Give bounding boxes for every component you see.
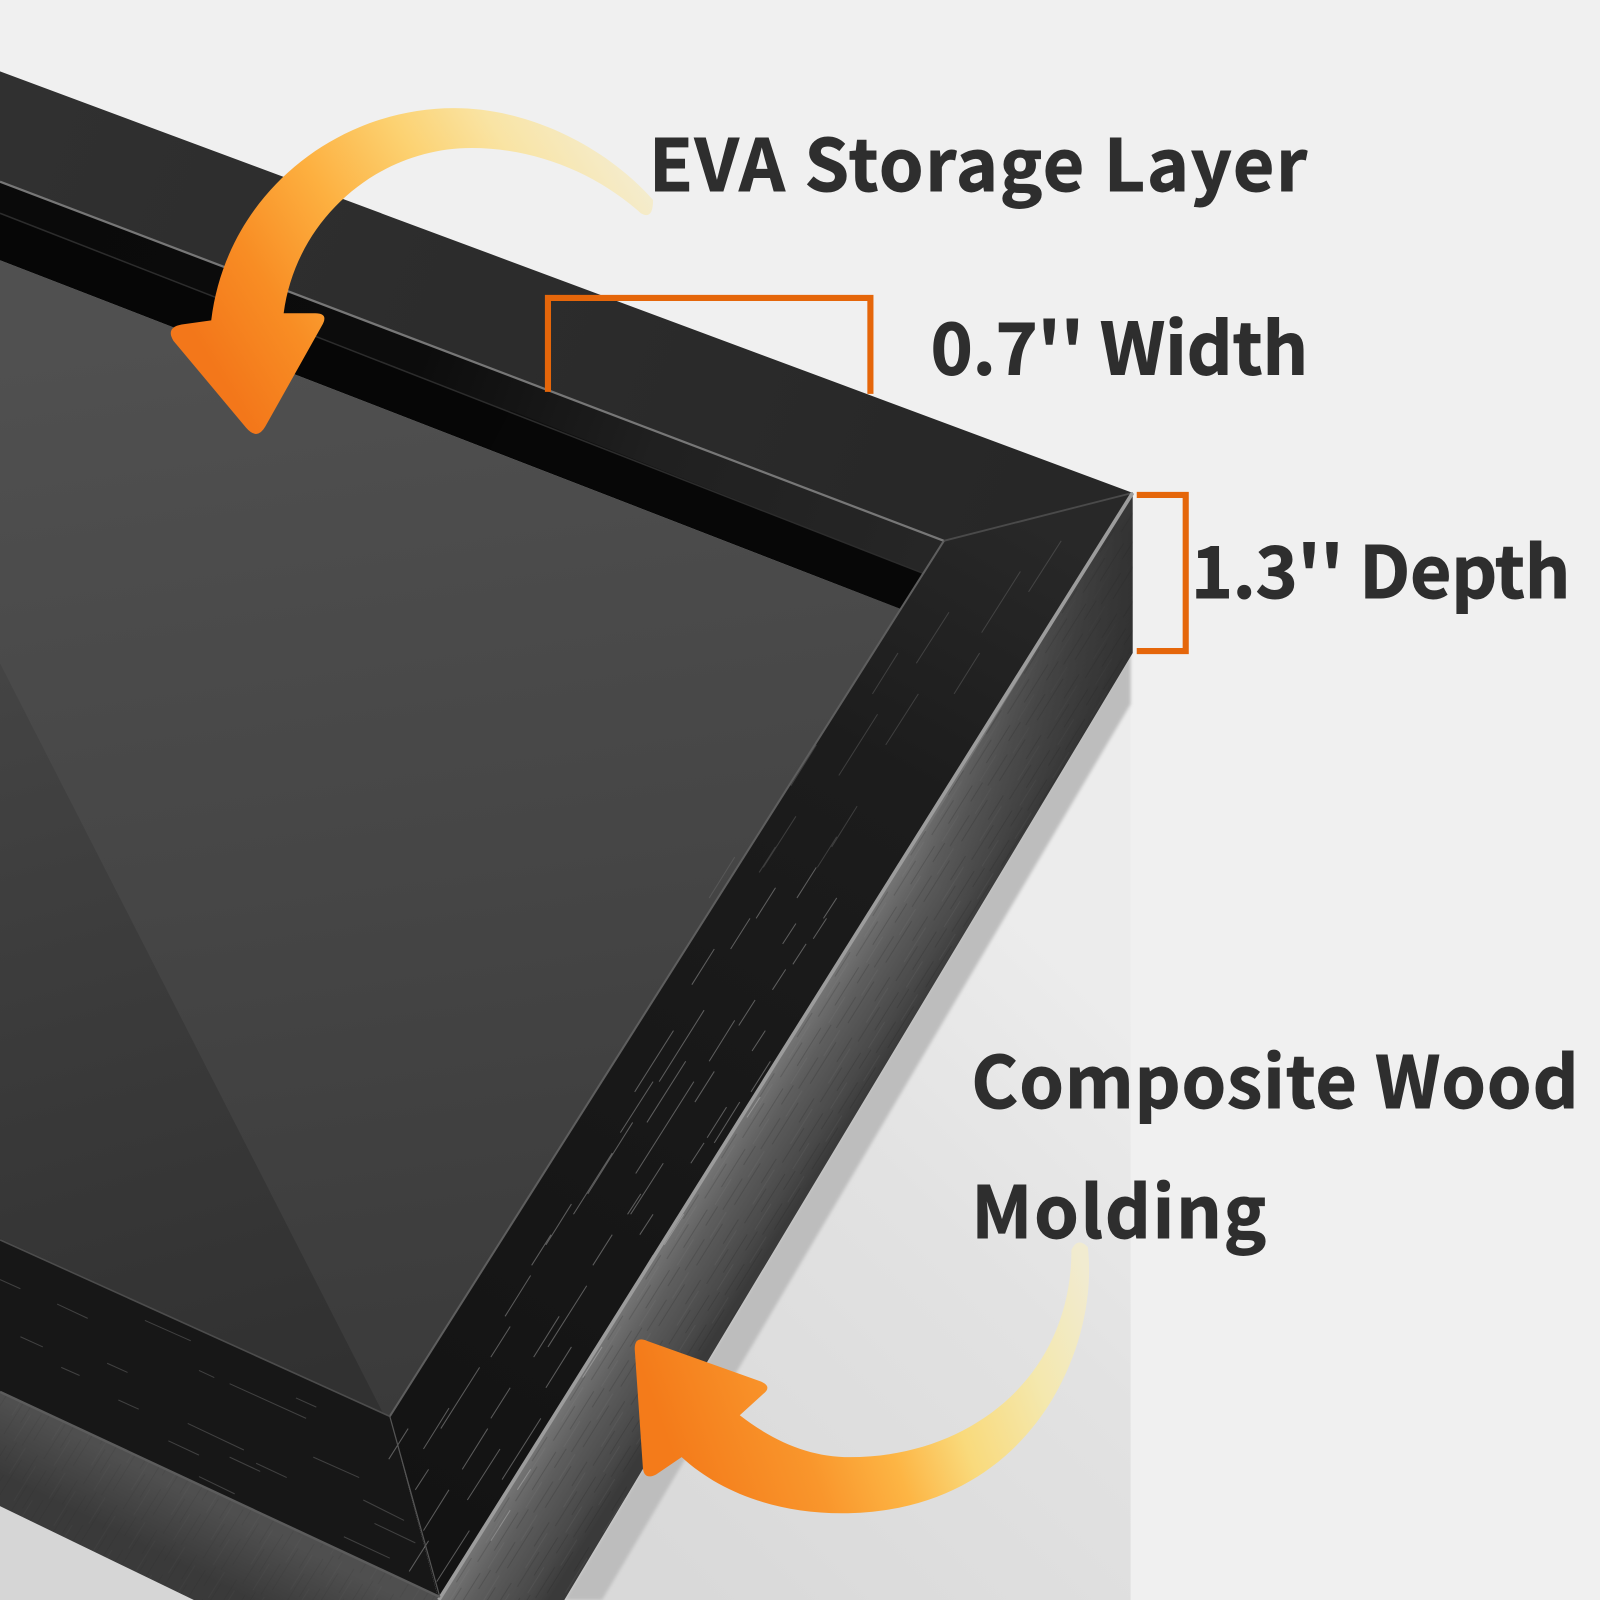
top face: [0, 71, 1133, 541]
arrow: EVA storage layer: [171, 108, 653, 434]
arrow: composite wood molding: [635, 1243, 1089, 1513]
lower-left shadow area: [0, 1500, 199, 1600]
glass reflection: [0, 663, 386, 1418]
storage channel: [0, 182, 944, 609]
frame edge highlights: [0, 182, 1133, 1600]
bracket: width: [548, 298, 870, 394]
label: composite wood molding: [971, 1025, 1579, 1259]
right side face: [439, 493, 1133, 1600]
frame: [0, 71, 1133, 1600]
right front face: [390, 493, 1133, 1600]
surface shading under the frame: [551, 653, 1131, 1600]
wood grain bottom face: [0, 1280, 415, 1558]
wood grain upper right face: [709, 541, 1061, 898]
wood grain right face: [389, 867, 837, 1582]
label: width: 0.7'' Width: [931, 291, 1308, 395]
left side face: [0, 1392, 440, 1600]
glass panel: [0, 260, 901, 1416]
bracket: depth: [1137, 495, 1186, 651]
bottom front face: [0, 1239, 440, 1600]
label: composite wood molding: Composite Wood: [971, 1025, 1579, 1129]
drop shadow right of the frame: [564, 653, 1131, 1600]
label: depth: 1.3'' Depth: [1191, 515, 1570, 619]
label: EVA Storage Layer: EVA Storage Layer: [649, 108, 1308, 212]
label: composite wood molding: Molding: [971, 1155, 1266, 1259]
